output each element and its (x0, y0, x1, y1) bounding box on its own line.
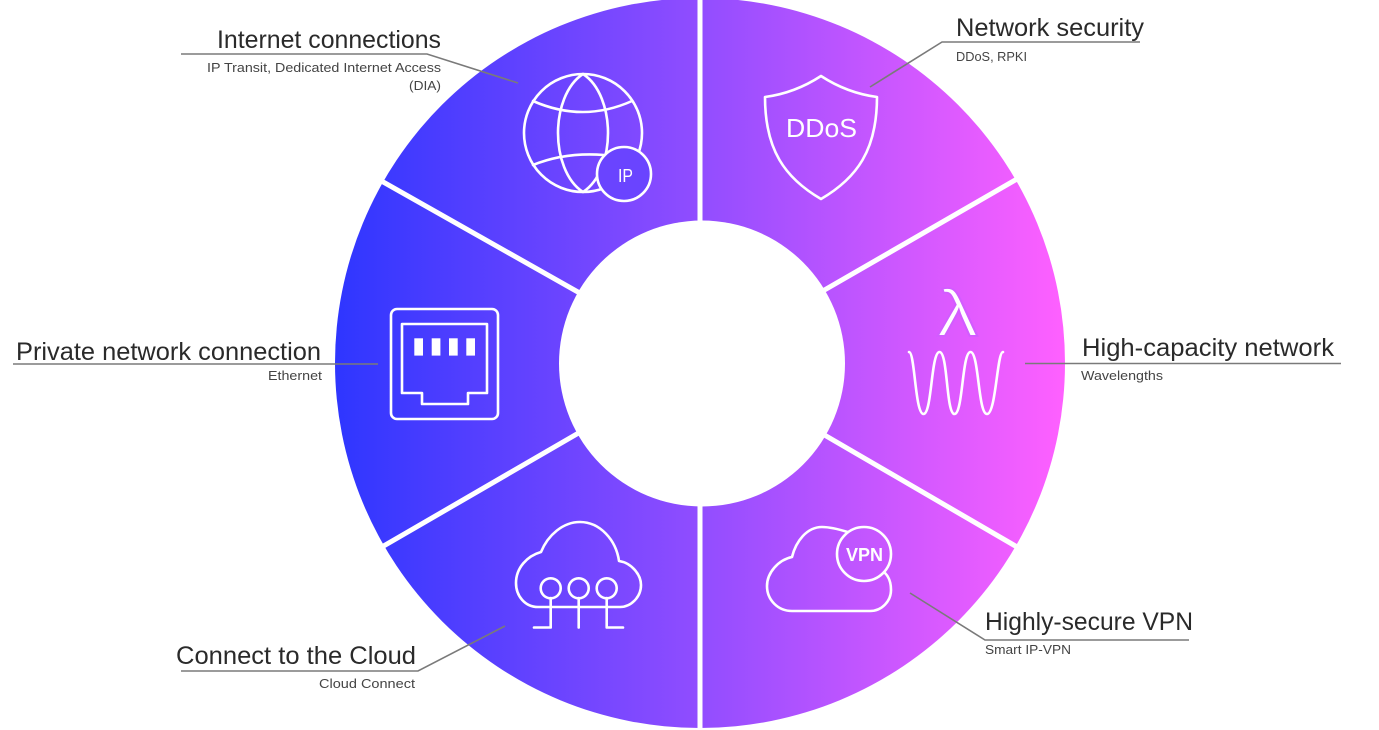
icon: VPN cloud: VPN (846, 545, 883, 565)
label: High-capacity network: Wavelengths (1081, 369, 1163, 383)
icon: lambda wavelength: λ (937, 276, 978, 350)
icon: cloud connect (516, 522, 641, 628)
icon: DDoS shield (765, 76, 877, 199)
label: Network security (870, 14, 1145, 87)
label: Internet connections (181, 26, 518, 93)
icon: globe with IP badge (524, 74, 651, 201)
label: High-capacity network: High-capacity network (1082, 334, 1335, 362)
icon: VPN cloud (767, 527, 891, 611)
label: Network security: DDoS, RPKI (956, 50, 1027, 64)
icon: lambda wavelength (909, 276, 1003, 414)
segmented gradient wheel (335, 0, 1065, 730)
label: Network security: Network security (956, 14, 1145, 42)
label: Connect to the Cloud (176, 626, 505, 691)
label: Private network connection: Private network connection (16, 338, 321, 366)
label: Highly-secure VPN (910, 593, 1193, 657)
label: Highly-secure VPN: Highly-secure VPN (985, 608, 1193, 636)
label: Connect to the Cloud: Cloud Connect (319, 677, 416, 691)
label: High-capacity network (1025, 334, 1341, 383)
icon: DDoS shield: DDoS (786, 113, 857, 143)
icon: globe with IP badge: IP (618, 166, 633, 186)
label: Connect to the Cloud: Connect to the Cloud (176, 642, 416, 670)
label: Internet connections: Internet connections (217, 26, 441, 54)
label: Private network connection: Ethernet (268, 369, 323, 383)
label: Highly-secure VPN: Smart IP-VPN (985, 643, 1071, 657)
label: Private network connection (13, 338, 378, 383)
icon: ethernet port (391, 309, 498, 419)
label: Internet connections: (DIA) (409, 79, 441, 93)
label: Internet connections: IP Transit, Dedicated Internet Access (207, 61, 441, 75)
